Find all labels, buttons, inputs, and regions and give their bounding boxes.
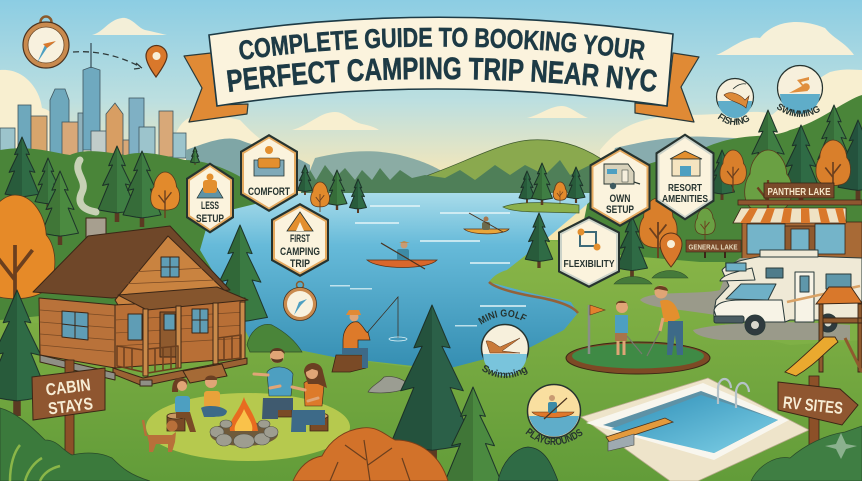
store: panther lake [733,183,862,260]
title text: COMPLETE GUIDE TO BOOKING YOUR [239,28,644,60]
cabin side wall [39,298,115,368]
icon: compass [23,16,69,68]
cabin back roof [33,226,230,298]
hexagon: less setup [186,162,234,234]
fisherman on stump [332,297,407,372]
swimming pool [581,378,809,481]
kayak large on lake [367,241,437,269]
mini golf child [615,301,642,355]
steps [183,364,227,383]
foreground conifers [391,305,501,481]
autumn trees [0,140,851,320]
label: OWN [610,193,631,205]
porch posts [143,302,245,376]
cabin gable [115,236,224,305]
porch window [128,314,142,340]
left tree by cabin [0,290,48,416]
far tree line [300,160,620,195]
door [160,312,177,357]
foreground bushes: green left [0,408,150,481]
mother [291,363,328,432]
lake shimmer [330,205,526,326]
dog [143,420,178,452]
shoreline edge [489,282,578,313]
road [640,258,850,340]
hexagon: flexibility [558,216,620,288]
label: AMENITIES [662,193,708,205]
playground with slide [785,287,862,376]
cabin front wall [115,298,245,368]
door pane [164,314,175,330]
icon: tent [287,212,313,231]
campfire glow [146,393,350,461]
family around campfire [143,348,328,452]
banner title ribbon [184,17,699,122]
boy [201,376,227,417]
hexagon: comfort [240,134,298,212]
label: LESS [201,200,219,212]
sign: cabin stays: CABIN [45,375,92,400]
activity: swimming icon: SWIMMING [777,104,820,118]
foreground bush: green centre [498,447,558,481]
label: TRIP [290,258,310,270]
father [254,348,293,419]
icon: armchair [254,146,284,176]
activity: fishing icon: FISHING [718,113,750,126]
tree behind cabin [212,225,268,335]
sign: cabin stays [32,360,105,460]
log lines [40,268,245,352]
label: SETUP [606,204,634,216]
icon: person on mat [197,174,223,198]
campfire [210,397,278,448]
sign: rv sites [778,376,858,464]
stone foundation [40,355,152,386]
kayak small on lake [464,213,509,234]
map pin and general lake sign: GENERAL LAKE [688,242,738,252]
shrubs by flexibility [614,270,688,284]
chimney smoke [78,160,96,212]
activity: mini golf swimming icon: MINI GOLF [478,310,527,324]
green hill behind lake [420,140,620,195]
title text: PERFECT CAMPING TRIP NEAR NYC [226,57,657,92]
front window [192,309,208,333]
sign: cabin stays: STAYS [47,394,94,418]
icon: map pin [146,46,167,77]
foreground bushes: green right [751,426,862,481]
sign: rv sites: RV SITES [782,393,844,418]
city skyline [0,43,186,158]
right forest hill [580,95,862,300]
hexagon: resort amenities [656,134,714,220]
mini golf green [566,305,710,374]
foreground bush: orange [293,428,448,481]
left forest hill [0,148,384,320]
distant hills [186,137,780,195]
title text [226,28,657,92]
girl [167,378,196,432]
upper window [161,257,179,277]
rv motorhome [714,250,862,335]
mini golf adult [647,286,683,356]
lake [200,193,600,368]
island peninsula [503,203,579,213]
activity: kayak playgrounds icon [526,384,582,445]
activity: swimming icon [776,64,824,118]
cabin side window [62,311,88,340]
sign: panther lake name: PANTHER LAKE [768,187,831,198]
sparkle watermark [825,433,857,459]
label: FIRST [290,233,310,245]
icon: connected nodes [578,228,600,250]
small compass [284,282,316,320]
map pin and general lake sign [660,233,741,267]
clouds [0,18,862,180]
icon: pavilion [670,151,702,176]
label: COMFORT [248,186,290,198]
lake shore and right meadow [0,240,862,481]
hexagon: first camping trip [271,203,329,277]
deck [113,358,247,386]
conifer trees [5,105,862,278]
log cabin [33,218,248,386]
activity: mini golf swimming icon [478,310,530,378]
label: FLEXIBILITY [564,258,614,270]
railing [117,335,241,373]
label: SETUP [196,213,224,225]
bush behind porch [247,324,302,352]
porch roof [118,287,248,310]
rock [368,377,410,393]
activity: kayak playgrounds icon: PLAYGROUNDS [526,428,582,445]
hexagon: own setup [590,147,650,227]
activity: mini golf swimming icon: Swimming [482,365,528,378]
label: RESORT [668,182,702,194]
activity: fishing icon [716,78,754,126]
chimney [86,218,106,253]
sky background [0,0,862,240]
icon: camper trailer [604,164,640,189]
dashed route arrow [73,52,142,69]
label: CAMPING [280,246,320,258]
